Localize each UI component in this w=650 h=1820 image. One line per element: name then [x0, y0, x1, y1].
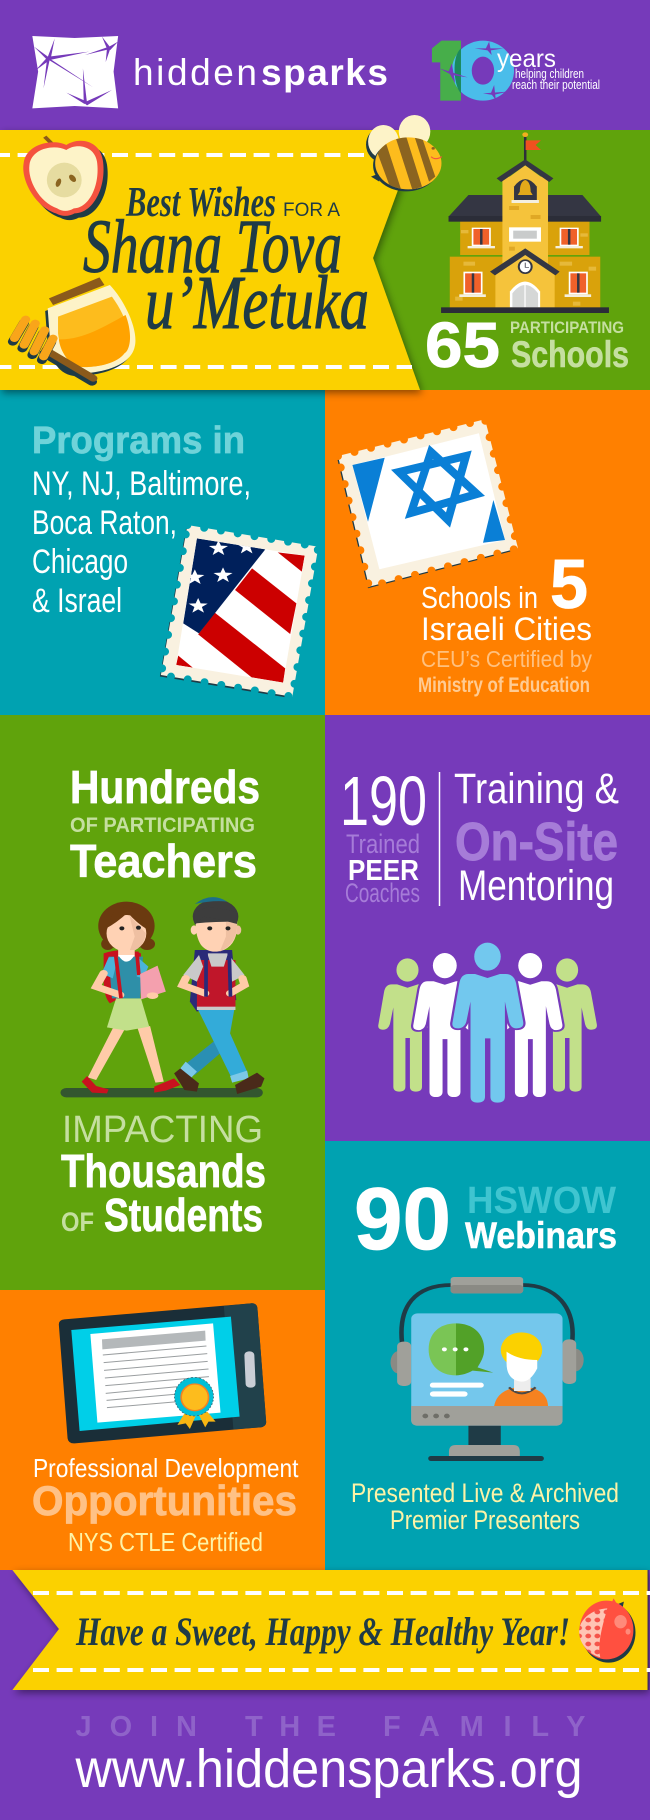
logo: hiddensparks wordmark — [133, 52, 388, 93]
girl — [82, 902, 180, 1093]
logo: 10 years: helping children — [515, 67, 584, 81]
text: locations: NY, NJ, Baltimore, — [32, 465, 251, 503]
text: locations: Boca Raton, — [32, 504, 177, 542]
text: ceu certified: CEU’s Certified by — [421, 646, 592, 672]
logo: 10 years: reach their potential — [512, 78, 600, 92]
text: join the family: THE — [245, 1711, 336, 1743]
title: u'metuka: u’Metuka — [145, 261, 369, 345]
text: premier presenters: Premier Presenters — [390, 1505, 580, 1535]
logo: hiddensparks wordmark: sparks — [261, 52, 388, 93]
panel: footer — [0, 1570, 650, 1820]
text: website url: www.hiddensparks.org — [75, 1739, 583, 1799]
panel: peer coaches and mentoring — [325, 715, 650, 1141]
heading: teachers: Teachers — [70, 835, 257, 887]
panel: professional development — [0, 1290, 325, 1570]
heading: hundreds: Hundreds — [70, 761, 260, 813]
text: trained: Trained — [346, 829, 420, 859]
text: join the family — [76, 1711, 586, 1743]
heading: training and: Training & — [454, 765, 619, 813]
heading: opportunities: Opportunities — [32, 1477, 297, 1524]
number: 5: 5 — [550, 545, 588, 623]
text: nys ctle certified: NYS CTLE Certified — [68, 1527, 263, 1557]
text: peer: PEER — [348, 855, 419, 887]
panel: programs in — [0, 390, 325, 715]
boy — [174, 897, 264, 1094]
text: best wishes: Best Wishes — [125, 180, 276, 226]
icon: bee — [366, 115, 442, 192]
logo: hidden sparks mark — [32, 36, 118, 108]
icon: monitor with headset — [390, 1277, 584, 1461]
text: schools in: Schools in — [421, 580, 538, 615]
logo: 10 years: years — [497, 45, 556, 73]
panel: teachers and students — [0, 715, 325, 1290]
logo: hiddensparks wordmark: hidden — [133, 52, 257, 93]
text: webinars: Webinars — [465, 1215, 617, 1256]
heading: mentoring: Mentoring — [458, 862, 614, 910]
text: hswow: HSWOW — [467, 1180, 616, 1222]
text: participating: PARTICIPATING — [510, 318, 624, 337]
panel: schools in israel — [325, 390, 650, 715]
heading: thousands: Thousands — [61, 1145, 266, 1197]
text: professional development: Professional Development — [33, 1453, 299, 1483]
icon: pomegranate — [579, 1598, 635, 1663]
text: for a: FOR A — [283, 200, 340, 221]
text: ministry of education: Ministry of Education — [418, 674, 590, 697]
illustration: students walking — [61, 897, 264, 1097]
text: coaches: Coaches — [345, 878, 420, 908]
text: locations — [32, 465, 251, 620]
icon: honey jar and dipper — [13, 277, 135, 382]
text: impacting: IMPACTING — [62, 1109, 263, 1151]
panel: header — [0, 0, 650, 130]
panel: 65 schools — [340, 130, 650, 390]
heading: on-site: On-Site — [455, 812, 618, 872]
icon: tablet with certificate — [59, 1303, 266, 1443]
logo: 10 years — [432, 41, 600, 101]
text: of participating: OF PARTICIPATING — [70, 814, 255, 837]
heading: students: Students — [104, 1189, 263, 1241]
icon: american flag stamp — [160, 525, 318, 698]
number: 190: 190 — [340, 762, 427, 840]
icon: apple — [23, 137, 108, 220]
text: locations: & Israel — [32, 582, 122, 620]
panel: best wishes banner — [0, 115, 442, 390]
title: shana tova: Shana Tova — [83, 205, 342, 289]
text: join the family: JOIN — [76, 1711, 197, 1743]
icon: group of people — [378, 943, 597, 1103]
text: locations: Chicago — [32, 543, 128, 581]
text: israeli cities: Israeli Cities — [421, 611, 592, 647]
text: of: OF — [61, 1207, 94, 1237]
number: 65: 65 — [425, 309, 500, 381]
banner: sweet year — [12, 1570, 650, 1690]
text: join the family: FAMILY — [383, 1711, 586, 1743]
number: 90: 90 — [354, 1169, 451, 1268]
panel: webinars — [325, 1141, 650, 1570]
icon: israeli flag stamp — [337, 419, 518, 588]
heading: programs in: Programs in — [32, 420, 245, 462]
illustration: school building — [441, 132, 609, 313]
